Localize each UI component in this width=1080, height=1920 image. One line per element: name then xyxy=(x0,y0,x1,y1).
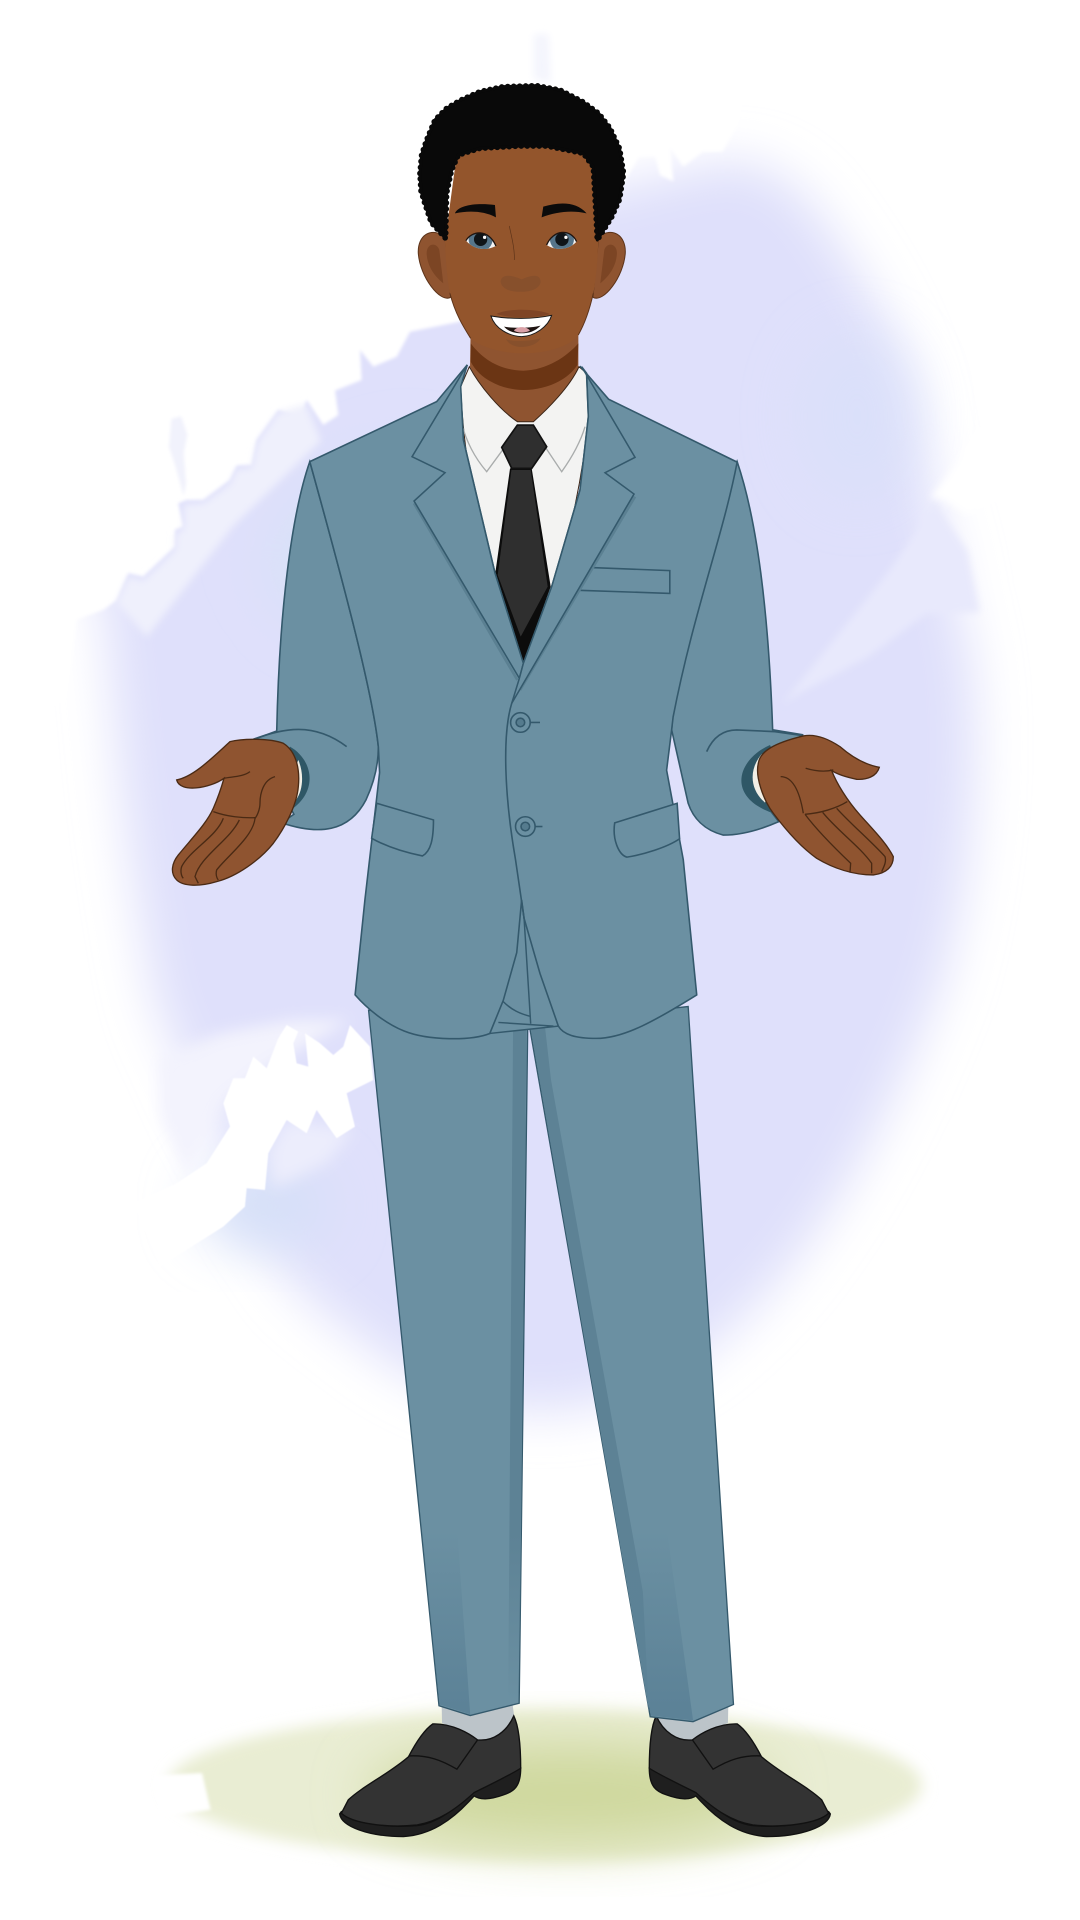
ears xyxy=(418,232,625,298)
mouth xyxy=(491,310,552,347)
trousers xyxy=(369,1007,733,1722)
trouser leg: right xyxy=(529,1007,733,1722)
pale streak: right xyxy=(782,500,980,704)
ground shadow: green wash xyxy=(153,1709,922,1861)
face xyxy=(445,143,598,353)
left hand and cuff xyxy=(172,729,347,885)
head xyxy=(418,86,625,353)
jacket body xyxy=(310,365,737,1039)
hair xyxy=(420,86,624,240)
pale washes near the jagged edge xyxy=(117,404,321,637)
neck xyxy=(470,327,578,422)
button: lower xyxy=(516,817,542,836)
collar lines xyxy=(462,423,585,472)
eyes xyxy=(466,232,578,249)
jacket right sleeve xyxy=(672,462,802,835)
lapels xyxy=(412,365,635,703)
tie xyxy=(495,425,551,663)
trouser leg: left xyxy=(369,1010,528,1716)
left sock and shoe xyxy=(340,1693,521,1837)
jacket details xyxy=(372,365,680,918)
button: upper xyxy=(511,713,540,732)
right hand and cuff xyxy=(707,730,893,875)
shoes and socks xyxy=(340,1693,830,1837)
right sock and shoe xyxy=(649,1693,830,1837)
chest pocket xyxy=(576,567,670,593)
right flap pocket xyxy=(614,803,680,857)
left flap pocket xyxy=(372,803,433,856)
shirt, tie and neck xyxy=(461,327,588,663)
background: watercolor lavender blob xyxy=(0,0,1022,1411)
eyebrows xyxy=(455,203,587,217)
left lapel xyxy=(412,365,523,678)
front closure line xyxy=(506,703,524,918)
right lapel xyxy=(512,367,635,703)
nose xyxy=(501,226,541,292)
shirt xyxy=(461,367,588,663)
white jagged streak: lower left xyxy=(133,1020,373,1267)
jacket left sleeve xyxy=(253,462,378,830)
white jagged edge: top left xyxy=(0,0,743,735)
vest panel below buttons xyxy=(490,900,558,1033)
